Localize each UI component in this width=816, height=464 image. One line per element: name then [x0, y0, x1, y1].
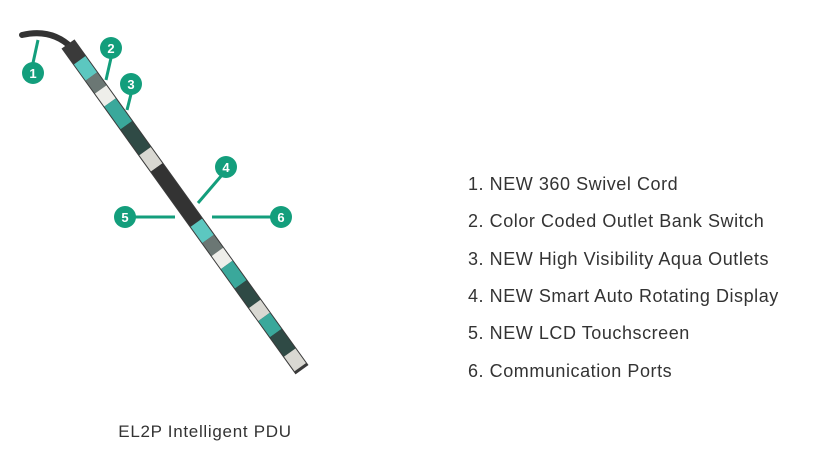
- callout 1: 1: [29, 66, 37, 81]
- text: 2. Color Coded Outlet Bank Switch: [468, 211, 764, 231]
- callout 6: [270, 206, 292, 228]
- callout 1: [22, 62, 44, 84]
- caption: EL2P Intelligent PDU: [118, 422, 292, 441]
- callout 2: [100, 37, 122, 59]
- PDU bar: [62, 39, 308, 374]
- callout 4: 4: [222, 160, 230, 175]
- text: 6. Communication Ports: [468, 361, 672, 381]
- icon: power cord: [22, 33, 72, 48]
- text: 4. NEW Smart Auto Rotating Display: [468, 286, 779, 306]
- callout 4: [215, 156, 237, 178]
- callout 3: 3: [127, 77, 135, 92]
- callout 5: [114, 206, 136, 228]
- text: 5. NEW LCD Touchscreen: [468, 323, 690, 343]
- feature list: [468, 174, 779, 381]
- callout 5: 5: [121, 210, 129, 225]
- callout 6: 6: [277, 210, 285, 225]
- callout 2: 2: [107, 41, 115, 56]
- callout 3: [120, 73, 142, 95]
- text: 3. NEW High Visibility Aqua Outlets: [468, 249, 769, 269]
- text: 1. NEW 360 Swivel Cord: [468, 174, 678, 194]
